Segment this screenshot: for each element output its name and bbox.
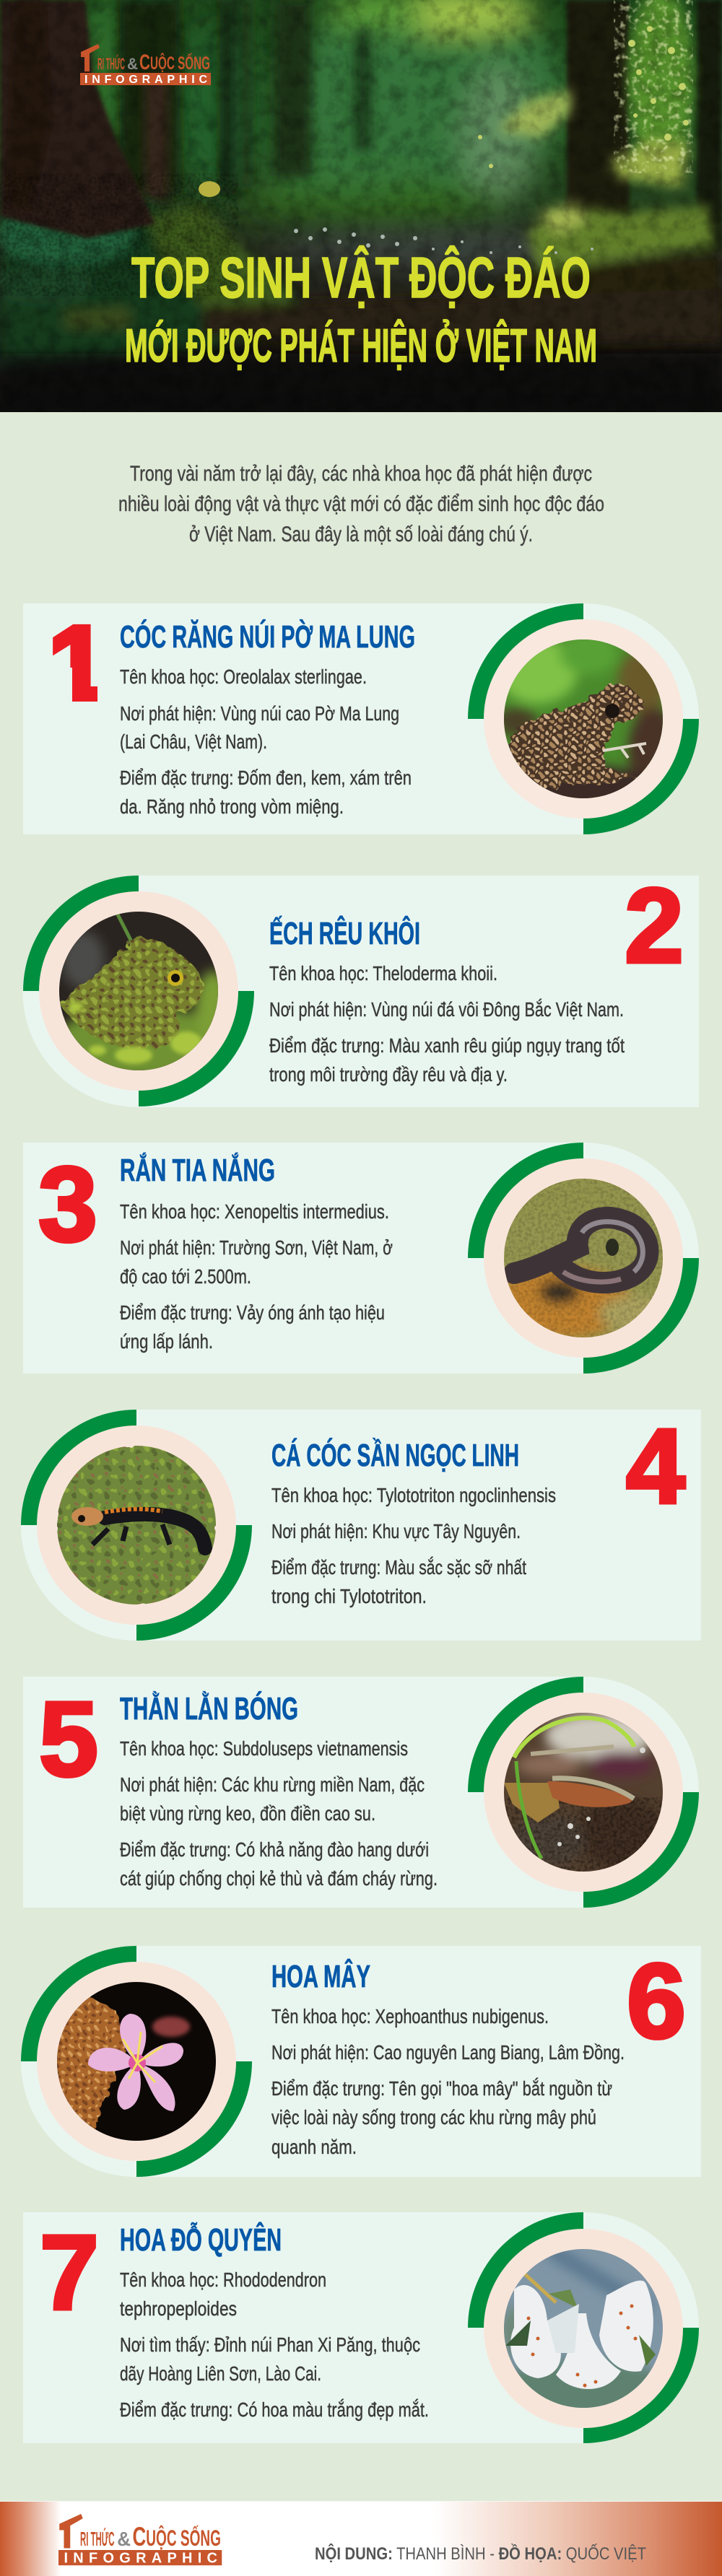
description text: Tên khoa học: Subdoluseps vietnamensis [120,1737,408,1760]
panel 2: Ếch rêu Khôi [22,867,699,1107]
footer logo: & [117,2528,131,2550]
intro paragraph [118,462,604,546]
logo: Tri Thức & Cuộc Sống Infographic: & [127,55,138,73]
credits: NỘI DUNG: THANH BÌNH - ĐỒ HỌA: QUỐC VIỆT [315,2544,646,2564]
heading: CÁ CÓC SẦN NGỌC LINH [271,1437,519,1473]
photo: toad [504,639,663,798]
description text: Điểm đặc trưng: Đốm đen, kem, xám trên [120,767,412,789]
number 6: 6 [627,1942,686,2061]
number 1: 1 [48,605,108,723]
description text: Điểm đặc trưng: Vảy óng ánh tạo hiệu [120,1301,385,1324]
description text: Nơi phát hiện: Các khu rừng miền Nam, đặc [120,1773,425,1796]
heading: ẾCH RÊU KHÔI [269,914,420,951]
description text: Nơi phát hiện: Vùng núi cao Pờ Ma Lung [120,702,399,725]
logo: Tri Thức & Cuộc Sống Infographic: UỘC SỐNG [150,52,210,74]
description text: Tên khoa học: Tylototriton ngoclinhensis [271,1484,556,1506]
number 4: 4 [626,1407,685,1526]
footer band [0,2501,722,2576]
description text: dãy Hoàng Liên Sơn, Lào Cai. [120,2362,321,2385]
logo: Tri Thức & Cuộc Sống Infographic: C [139,51,150,74]
description text: da. Răng nhỏ trong vòm miệng. [120,795,344,818]
forest scene illustration [0,0,722,412]
photo: skink [504,1713,664,1872]
description text [120,2269,429,2421]
description text: Nơi phát hiện: Trường Sơn, Việt Nam, ở [120,1236,393,1259]
photo: flower [54,1982,216,2141]
photo: salamander [57,1446,216,1604]
description text: Nơi phát hiện: Vùng núi đá vôi Đông Bắc Việt Nam. [269,998,624,1021]
number 7: 7 [40,2214,99,2332]
description text: Tên khoa học: Xephoanthus nubigenus. [271,2005,549,2027]
description text: Tên khoa học: Rhododendron [120,2269,326,2291]
description text [269,962,625,1086]
description text: Nơi phát hiện: Cao nguyên Lang Biang, Lâm Đồng. [271,2041,625,2064]
description text: Điểm đặc trưng: Có hoa màu trắng đẹp mắt. [120,2398,429,2421]
description text: Điểm đặc trưng: Có khả năng đào hang dưới [120,1838,429,1861]
description text: quanh năm. [271,2136,357,2158]
heading: CÓC RĂNG NÚI PỜ MA LUNG [120,619,415,655]
title [125,245,597,372]
description text: Điểm đặc trưng: Màu sắc sặc sỡ nhất [271,1556,526,1579]
description text: việc loài này sống trong các khu rừng mây phủ [271,2106,596,2129]
logo: Tri Thức & Cuộc Sống Infographic: INFOGRAPHIC [84,74,207,86]
foliage and texture overlays [0,0,722,357]
number 2: 2 [625,867,684,985]
description text [271,2005,625,2158]
panel 5: Thằn lằn bóng [23,1677,699,1908]
footer logo: UỘC SỐNG [146,2525,221,2551]
description text: trong chi Tylototriton. [271,1585,427,1607]
photo: snake [504,1179,663,1337]
photo: moss frog [59,912,218,1070]
footer logo: C [133,2521,146,2551]
description text: trong môi trường đầy rêu và địa y. [269,1063,508,1086]
panel 3: Rắn tia nắng [23,1143,699,1374]
description text [271,1484,556,1607]
footer logo: INFOGRAPHIC [64,2551,217,2567]
logo: Tri Thức & Cuộc Sống Infographic [80,44,211,86]
footer logo: RI THỨC [80,2528,115,2550]
description text: Tên khoa học: Xenopeltis intermedius. [120,1200,389,1223]
heading: THẰN LẰN BÓNG [120,1690,298,1726]
description text: ứng lấp lánh. [120,1330,213,1353]
description text: Tên khoa học: Oreolalax sterlingae. [120,665,367,688]
panel 4: Cá cóc sần Ngọc Linh [21,1407,701,1641]
logo: Tri Thức & Cuộc Sống Infographic: RI THỨC [97,55,125,73]
heading: HOA ĐỖ QUYÊN [120,2221,282,2258]
description text: Nơi phát hiện: Khu vực Tây Nguyên. [271,1520,521,1542]
photo: white rhododendron [504,2249,663,2408]
description text: Điểm đặc trưng: Tên gọi "hoa mây" bắt nguồn từ [271,2077,612,2100]
description text [120,1737,438,1890]
heading: RẮN TIA NẮNG [120,1152,275,1188]
description text: độ cao tới 2.500m. [120,1265,251,1288]
footer logo [58,2514,222,2567]
description text: biệt vùng rừng keo, đồn điền cao su. [120,1802,375,1825]
description text: (Lai Châu, Việt Nam). [120,730,267,753]
description text: tephropeploides [120,2297,237,2320]
panel 1: Cóc răng núi Pờ Ma Lung [23,603,699,834]
description text [120,665,412,818]
heading: HOA MÂY [271,1958,370,1994]
intro paragraph: ở Việt Nam. Sau đây là một số loài đáng chú ý. [189,523,533,546]
description text: Tên khoa học: Theloderma khoii. [269,962,497,984]
number 3: 3 [38,1145,97,1264]
description text: Nơi tìm thấy: Đỉnh núi Phan Xi Păng, thuộc [120,2333,420,2356]
number 5: 5 [39,1680,98,1799]
intro paragraph: Trong vài năm trở lại đây, các nhà khoa học đã phát hiện được [130,462,592,486]
description text [120,1200,393,1353]
panel 7: Hoa đỗ quyên [23,2212,699,2443]
description text: Điểm đặc trưng: Màu xanh rêu giúp ngụy trang tốt [269,1034,625,1057]
panel 6: Hoa mây [21,1942,701,2177]
header banner: forest photo with title [0,0,722,412]
description text: cát giúp chống chọi kẻ thù và đám cháy rừng. [120,1867,438,1890]
